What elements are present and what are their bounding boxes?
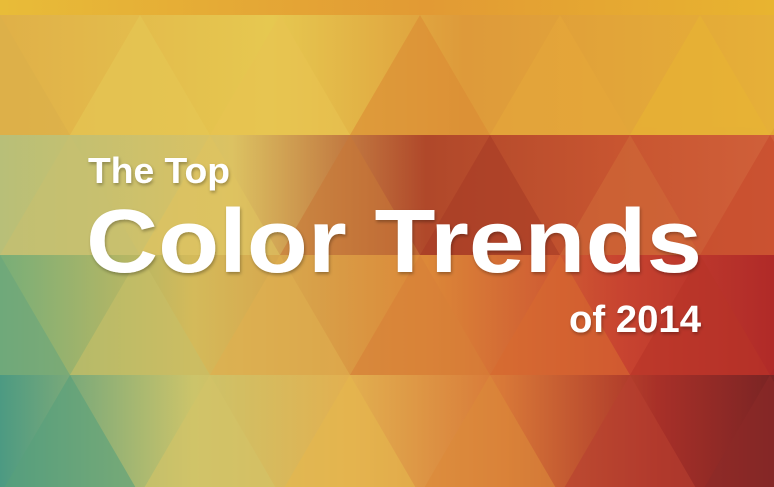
title line 2: Color Trends (86, 192, 702, 292)
title line 1: The Top (88, 150, 230, 191)
title (86, 150, 702, 341)
title line 3: of 2014 (569, 299, 701, 341)
